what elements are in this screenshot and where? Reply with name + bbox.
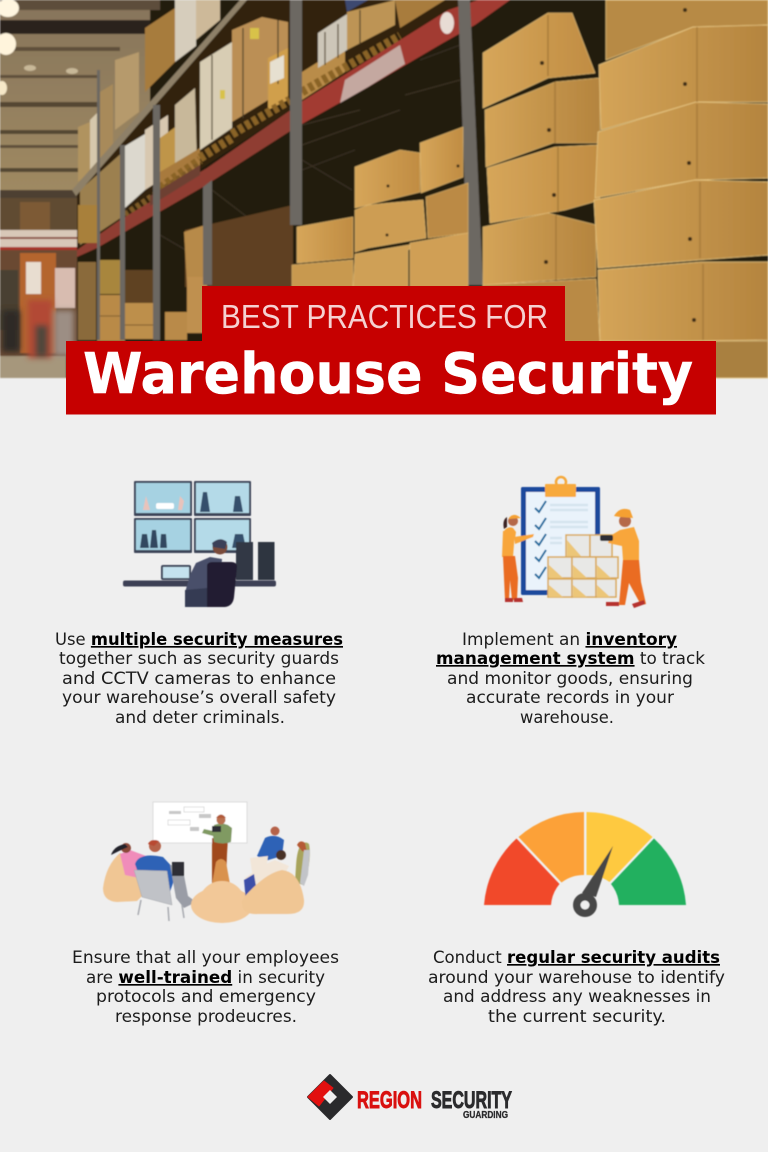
carton recycling marks <box>386 8 696 322</box>
text: inventory management system: warehouse. <box>520 708 614 727</box>
text: inventory management system <box>436 630 705 727</box>
presenter <box>212 838 228 884</box>
seated group right <box>295 842 310 885</box>
server towers <box>236 542 253 580</box>
gauge: green segment <box>611 838 686 905</box>
beanbag right <box>242 870 304 914</box>
text: inventory management system: Implement an inventory <box>462 630 677 649</box>
text: regular security audits <box>428 948 725 1026</box>
beanbag left with woman <box>103 853 147 902</box>
text: well-trained employees: response prodeucres. <box>115 1007 297 1026</box>
laptop <box>161 565 191 580</box>
text: regular security audits: Conduct regular security audits <box>433 948 720 967</box>
gauge meter <box>484 812 686 917</box>
banner: top strip <box>202 286 565 342</box>
beanbag centre <box>212 859 230 884</box>
text: well-trained employees: Ensure that all your employees <box>72 948 339 967</box>
gauge: orange segment <box>518 812 584 882</box>
text: well-trained employees <box>72 948 339 1026</box>
logo: region security guarding: GUARDING <box>463 1110 508 1121</box>
gauge: yellow segment <box>586 812 652 882</box>
man in chair <box>135 856 177 900</box>
wrap and straps <box>212 10 360 140</box>
cartons right stack <box>594 0 768 378</box>
checklist <box>535 501 546 578</box>
text: well-trained employees: are well-trained in security <box>86 968 325 987</box>
text: multiple security measures: together such as security guards <box>59 649 339 668</box>
text: multiple security measures: your warehouse’s overall safety <box>62 688 336 707</box>
worker right <box>600 509 646 608</box>
gauge: needle <box>582 846 613 897</box>
under shelf bracing <box>160 45 460 260</box>
pallets on shelf <box>160 36 400 188</box>
text: inventory management system: and monitor goods, ensuring <box>447 669 693 688</box>
logo: region security guarding <box>308 1075 512 1121</box>
upper shelving goods <box>77 0 500 250</box>
desk <box>123 580 276 586</box>
text: well-trained employees: protocols and emergency <box>96 987 316 1006</box>
cartons centre <box>292 127 468 290</box>
heading: warehouse security: Warehouse Security <box>83 342 693 407</box>
heading: best practices for: BEST PRACTICES FOR <box>221 298 548 335</box>
worker left <box>502 515 534 602</box>
icon: inventory clipboard with workers <box>502 477 646 608</box>
warehouse photo <box>0 0 768 378</box>
gauge: red segment <box>484 838 560 905</box>
title banner <box>66 286 716 414</box>
shelf posts <box>97 0 483 340</box>
logo wordmark: REGION <box>357 1087 422 1114</box>
text: regular security audits: the current security. <box>488 1007 666 1026</box>
blurred workers <box>2 300 74 358</box>
lower shelf cartons left <box>78 205 293 341</box>
whiteboard <box>153 802 247 843</box>
text: multiple security measures: and CCTV cameras to enhance <box>62 669 336 688</box>
boxes <box>548 535 618 597</box>
text: inventory management system: management system to track <box>436 649 705 668</box>
banner: main strip <box>66 341 716 414</box>
carton tape seams <box>548 15 703 340</box>
text: multiple security measures: Use multiple security measures <box>55 630 343 649</box>
gauge: hub <box>573 893 597 917</box>
text: multiple security measures: and deter criminals. <box>115 708 285 727</box>
clipboard <box>521 487 600 595</box>
text: inventory management system: accurate records in your <box>466 688 674 707</box>
monitors <box>134 481 251 553</box>
text: regular security audits: around your warehouse to identify <box>428 968 725 987</box>
icon: cctv control room <box>123 481 276 607</box>
left aisle ceiling and floor <box>0 0 160 378</box>
cartons middle stack <box>483 13 600 342</box>
text: regular security audits: and address any weaknesses in <box>443 987 711 1006</box>
logo mark <box>308 1075 352 1119</box>
logo: region security guarding: SECURITY <box>431 1087 512 1114</box>
steel shelf beams <box>72 0 510 257</box>
operator <box>185 557 222 605</box>
icon: training session <box>103 802 310 923</box>
text: multiple security measures <box>55 630 343 727</box>
